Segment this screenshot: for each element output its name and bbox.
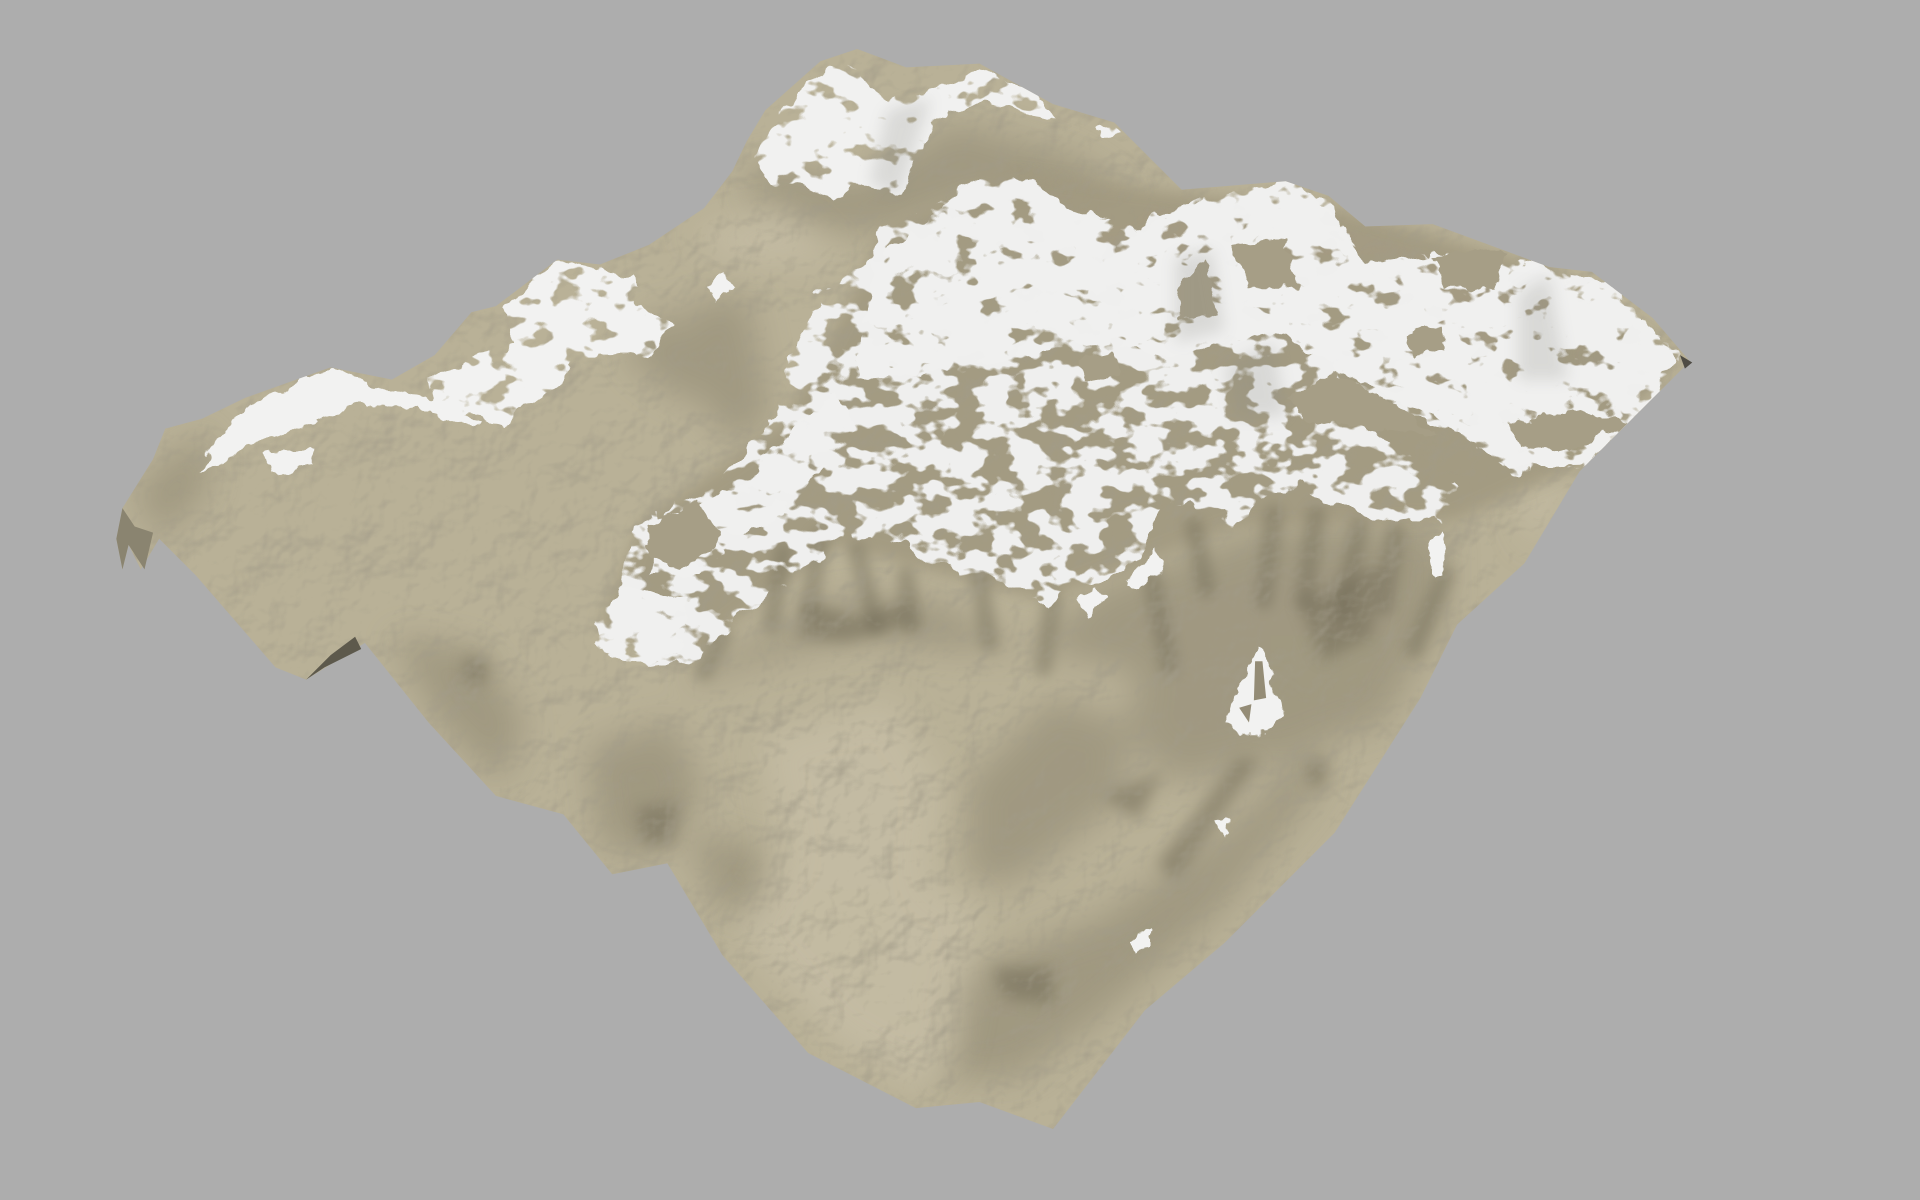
vertical gullies under massif	[704, 514, 1445, 671]
bare rock on spire	[1239, 661, 1266, 722]
dark underside at left edge	[116, 508, 153, 569]
snow: dense upper massif	[593, 171, 1675, 667]
terrain base	[122, 49, 1689, 1129]
snow: isolated spires	[1078, 533, 1445, 955]
snow: lower massif with bare patches	[598, 171, 1675, 667]
snow: north peaks	[753, 64, 1120, 202]
massif underlay	[600, 171, 1675, 661]
relief texture	[134, 58, 1664, 1128]
snow shading	[869, 98, 1567, 416]
snow: north-west summit	[429, 260, 673, 422]
3D terrain illustration	[116, 49, 1692, 1129]
snow: western ridge	[198, 272, 735, 475]
terrain shading	[134, 118, 1454, 1086]
large bare plateaus	[647, 239, 1629, 569]
